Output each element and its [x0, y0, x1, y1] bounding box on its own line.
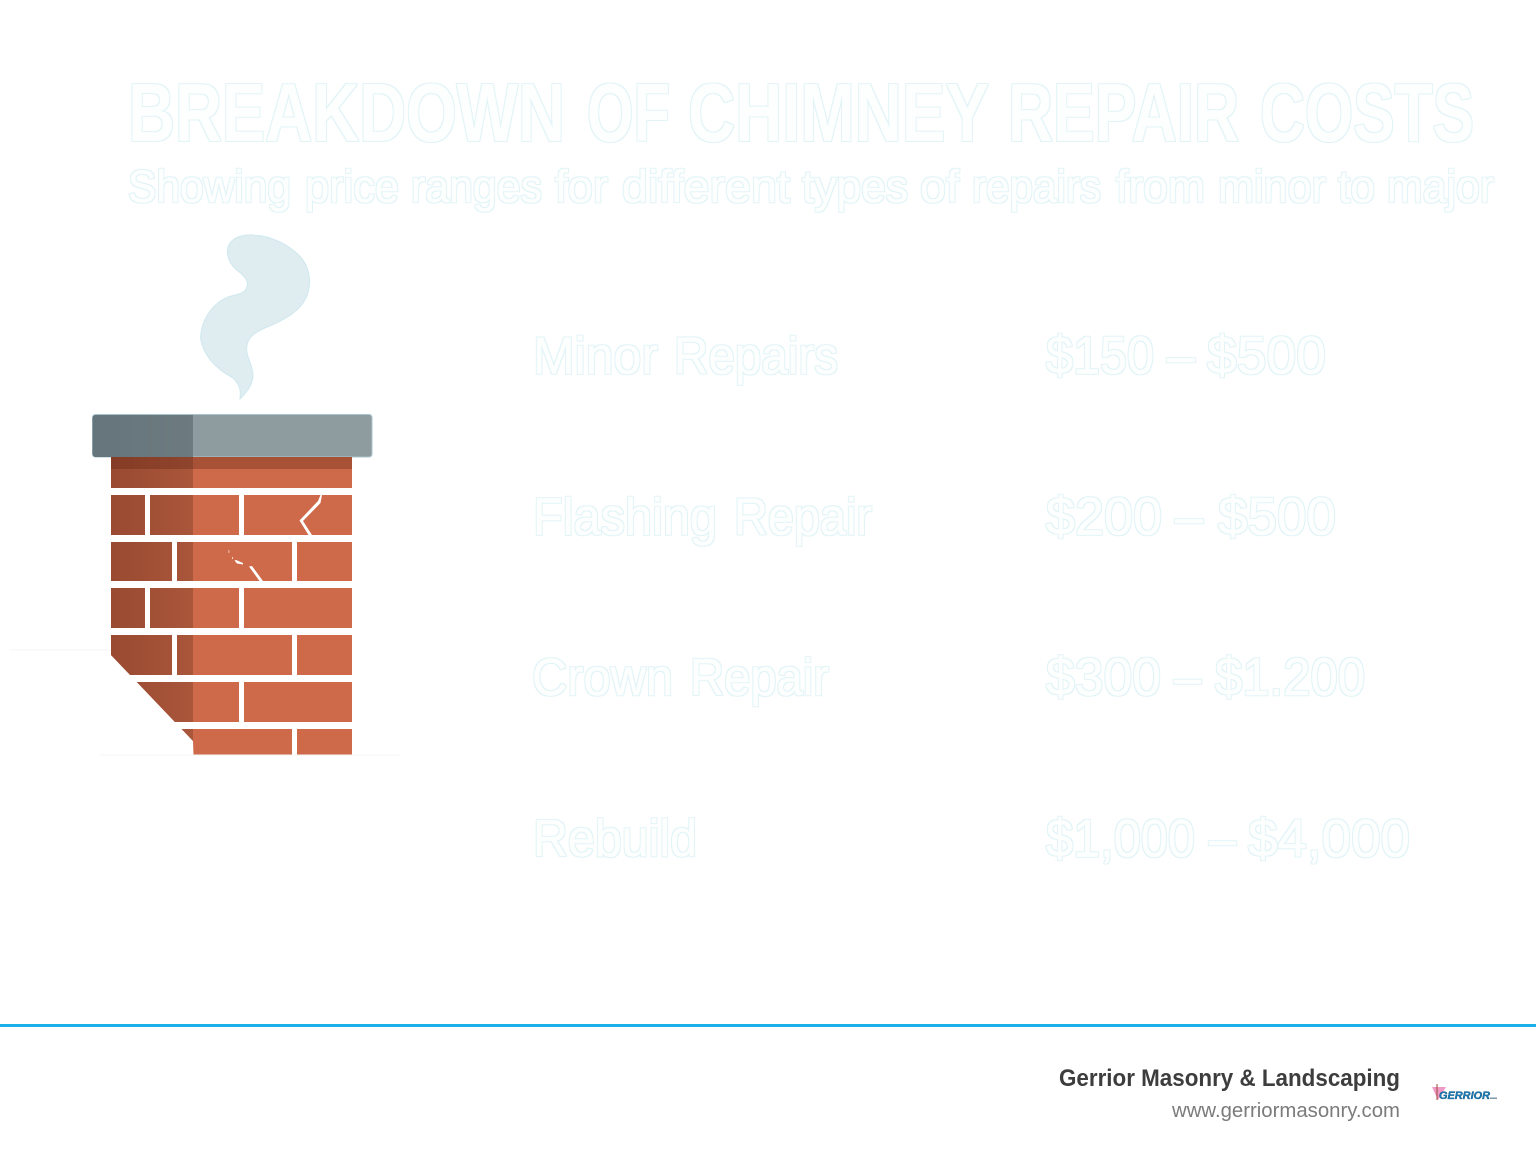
price: $150: [1046, 326, 1154, 386]
subtitle: price: [305, 161, 399, 212]
label: [533, 488, 872, 546]
price: $1.200: [1215, 648, 1365, 707]
row: rebuild: [533, 810, 1410, 868]
label: [532, 649, 829, 707]
label: Flashing: [533, 488, 717, 546]
row: minor repairs: [533, 326, 1326, 386]
chimney cap: [92, 414, 372, 457]
price: [1046, 648, 1365, 707]
subtitle: [128, 161, 1494, 212]
subtitle: Showing: [128, 161, 291, 212]
brick wall: [111, 457, 352, 755]
label: [533, 328, 838, 386]
title: [128, 66, 1474, 159]
label: Rebuild: [533, 810, 697, 868]
icon: Gerrior logo: GERRIOR: [1439, 1090, 1490, 1102]
price: $500: [1207, 326, 1326, 386]
price: [1046, 488, 1336, 546]
price: –: [1174, 648, 1201, 707]
title: CHIMNEY: [688, 66, 989, 159]
subtitle: different: [622, 161, 791, 212]
faint ground lines: [10, 650, 400, 755]
label: Minor: [533, 328, 658, 386]
row: flashing repair: [533, 488, 1336, 546]
price: [1046, 810, 1410, 868]
price: $200: [1046, 488, 1162, 546]
footer company name: Gerrior Masonry & Landscaping: [1059, 1065, 1400, 1092]
price: $500: [1218, 488, 1336, 546]
footer rule: [0, 1024, 1536, 1027]
subtitle: ranges: [411, 161, 542, 212]
subtitle: from: [1116, 161, 1205, 212]
subtitle: major: [1387, 161, 1494, 212]
subtitle: minor: [1218, 161, 1326, 212]
price: $4,000: [1248, 810, 1410, 868]
icon: smoke: [200, 235, 310, 399]
price: $300: [1046, 648, 1161, 707]
title: BREAKDOWN: [128, 66, 565, 159]
brick cracks: [228, 495, 322, 581]
label: Repair: [690, 649, 829, 707]
label: Crown: [532, 649, 673, 707]
icon: Gerrior logo: [1432, 1084, 1497, 1102]
subtitle: of: [920, 161, 960, 212]
title: REPAIR: [1008, 66, 1239, 159]
subtitle: types: [802, 161, 908, 212]
icon: chimney illustration: [92, 235, 372, 755]
price: –: [1167, 326, 1195, 386]
label: Repair: [734, 488, 872, 546]
price: $1,000: [1046, 810, 1195, 868]
footer website: www.gerriormasonry.com: [1171, 1100, 1400, 1122]
title: OF: [587, 66, 670, 159]
price: –: [1209, 810, 1236, 868]
price: –: [1175, 488, 1203, 546]
row: crown repair: [532, 648, 1365, 707]
label: Repairs: [674, 328, 838, 386]
subtitle: repairs: [972, 161, 1101, 212]
price: [1046, 326, 1326, 386]
subtitle: for: [555, 161, 608, 212]
subtitle: to: [1338, 161, 1375, 212]
